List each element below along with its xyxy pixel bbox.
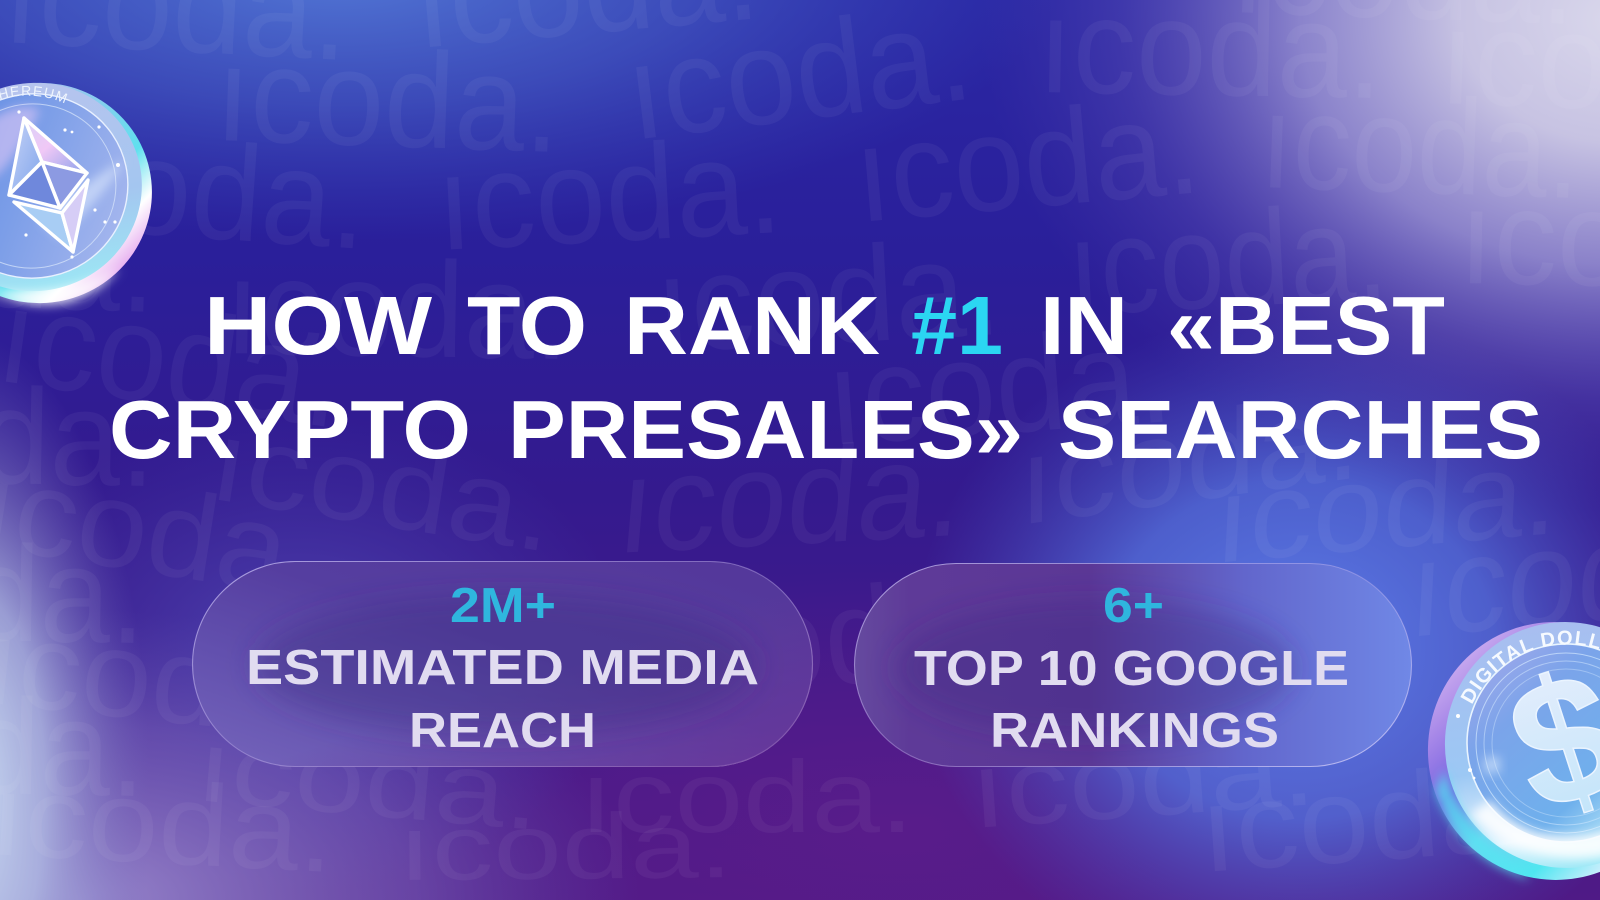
watermark pattern: icoda: ıcoda. (203, 395, 564, 576)
watermark pattern: icoda: ıcoda. (213, 17, 563, 181)
watermark pattern: icoda: ıcoda. (433, 109, 785, 279)
stat: 2M+: 2M+ (450, 579, 556, 633)
watermark pattern: icoda: ıcoda. (1195, 738, 1549, 898)
label: estimated media: ESTIMATED MEDIA (246, 641, 759, 695)
watermark pattern: icoda: ıcoda. (652, 211, 1004, 381)
watermark pattern: icoda: ıcoda. (848, 69, 1205, 251)
watermark pattern: icoda: ıcoda. (0, 258, 353, 457)
title (109, 279, 1543, 476)
title: «BEST (1167, 279, 1445, 372)
watermark pattern: icoda: ıcoda. (18, 102, 373, 278)
watermark pattern: icoda: ıcoda. (612, 411, 970, 582)
pill: estimated media reach (192, 561, 813, 767)
watermark pattern: icoda: ıcoda. (1212, 421, 1563, 590)
icon: digital dollar coin (1428, 622, 1600, 884)
title: SEARCHES (1058, 383, 1543, 476)
title: #1 (911, 279, 1003, 372)
watermark pattern: icoda: ıcoda. (649, 547, 1006, 729)
label: reach: REACH (409, 704, 596, 758)
icon: ethereum coin (0, 82, 152, 313)
label: top 10 google: TOP 10 GOOGLE (914, 642, 1349, 696)
watermark pattern: icoda: ıcoda. (579, 740, 914, 854)
watermark pattern: icoda: ıcoda. (192, 709, 546, 852)
watermark pattern: icoda: ıcoda. (1064, 175, 1391, 344)
title: RANK (624, 279, 880, 372)
stat: 6+: 6+ (1103, 579, 1164, 633)
title: HOW (204, 279, 433, 372)
watermark pattern: icoda: ıcoda. (223, 230, 571, 388)
title: IN (1040, 279, 1128, 372)
watermark pattern: icoda: ıcoda. (966, 707, 1319, 852)
icon: ethereum diamond (9, 118, 88, 252)
watermark pattern: icoda: ıcoda. (397, 794, 733, 900)
title: CRYPTO (109, 383, 471, 476)
pill: top 10 google rankings (854, 564, 1412, 766)
watermark pattern: icoda: ıcoda. (1019, 365, 1361, 552)
title: TO (467, 279, 587, 372)
label: rankings: RANKINGS (990, 704, 1279, 758)
title: PRESALES» (508, 383, 1023, 476)
watermark pattern: icoda: ıcoda. (821, 298, 1176, 474)
